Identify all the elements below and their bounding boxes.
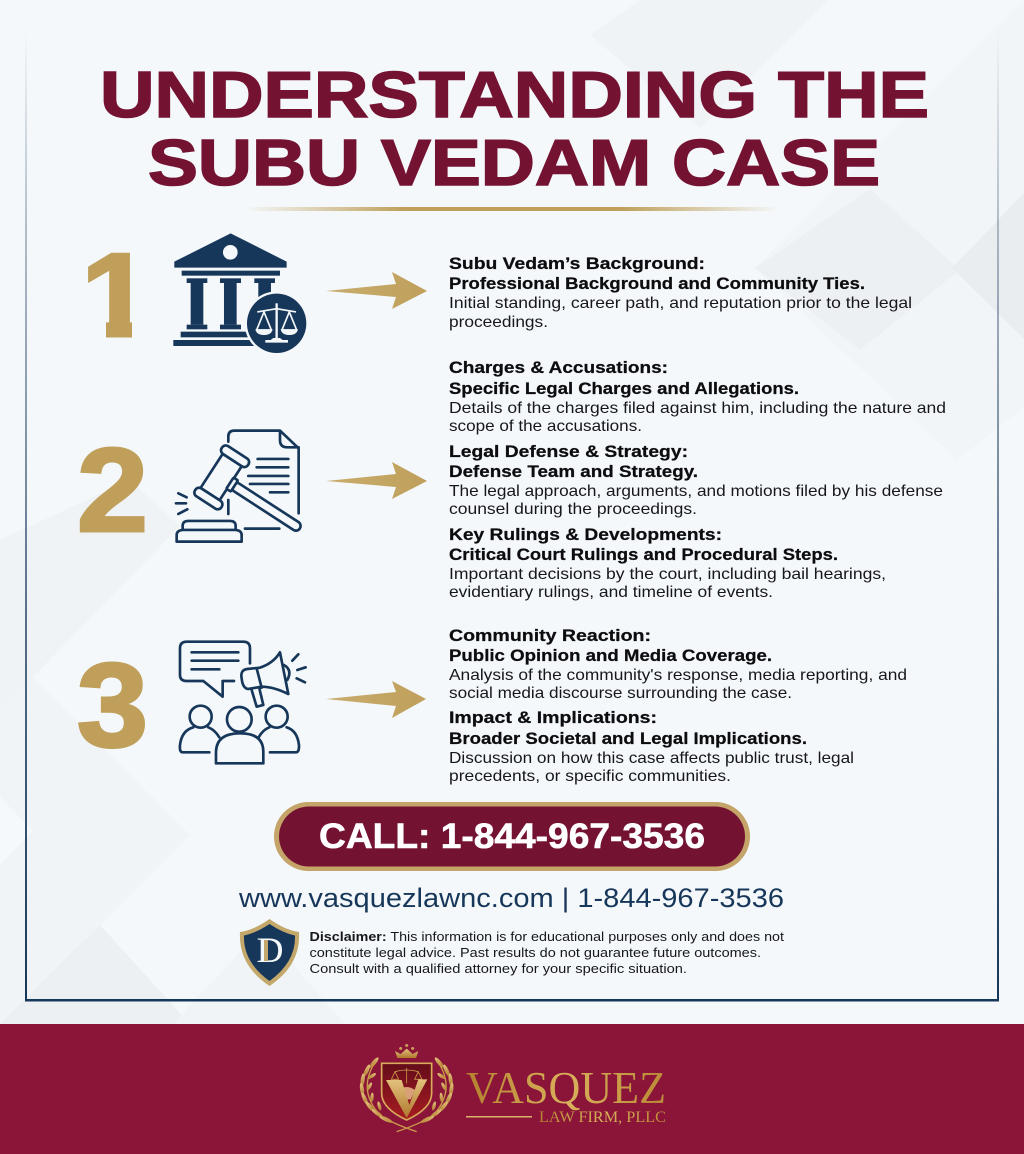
text block: Charges: Details of the charges filed against him, including the nature and <box>449 400 946 417</box>
arrow 3 <box>326 681 426 718</box>
text block: Charges: Specific Legal Charges and Allegations. <box>449 379 799 398</box>
icon: disclaimer shield <box>240 919 299 986</box>
text block: Background <box>449 254 912 331</box>
text block: Impact: Discussion on how this case affects public trust, legal <box>449 750 854 767</box>
right laurel <box>397 1056 454 1132</box>
logo wordmark: VASQUEZ <box>466 1062 666 1113</box>
text block: Defense: counsel during the proceedings. <box>449 501 697 518</box>
text block: Community: Community Reaction: <box>449 626 651 645</box>
disclaimer text: Disclaimer: This information is for educational purposes only and does not <box>310 929 784 944</box>
number 3: 3 <box>77 639 148 772</box>
text block: Community <box>449 626 907 702</box>
arrow 2 <box>326 462 427 499</box>
footer band <box>0 1024 1024 1154</box>
left laurel <box>359 1056 417 1132</box>
number 2: 2 <box>77 424 148 557</box>
icon: gavel and document <box>176 431 316 553</box>
icon: speech bubble, megaphone and people <box>180 642 306 763</box>
number 1: 1 <box>81 229 152 362</box>
text block: Background: Initial standing, career path, and reputation prior to the legal <box>449 295 912 312</box>
arrow 1 <box>326 272 427 309</box>
icon: disclaimer shield: D <box>256 930 284 970</box>
text block: Community: Analysis of the community's response, media reporting, and <box>449 667 907 684</box>
text block: Background: proceedings. <box>449 314 548 331</box>
text block: Charges: scope of the accusations. <box>449 418 642 435</box>
text block: Rulings: evidentiary rulings, and timeline of events. <box>449 584 773 601</box>
crest shield <box>382 1063 432 1120</box>
text block: Impact: Impact & Implications: <box>449 708 657 727</box>
text block: Community: social media discourse surrounding the case. <box>449 685 792 702</box>
text block: Charges: Charges & Accusations: <box>449 358 668 377</box>
call button <box>274 802 750 871</box>
text block: Charges <box>449 358 946 435</box>
text block: Rulings <box>449 525 886 601</box>
text block: Defense: The legal approach, arguments, and motions filed by his defense <box>449 483 943 500</box>
gold title rule <box>245 207 780 211</box>
text block: Defense: Defense Team and Strategy. <box>449 462 698 481</box>
logo emblem <box>359 1044 454 1132</box>
text block: Rulings: Important decisions by the court, including bail hearings, <box>449 566 886 583</box>
text block: Background: Subu Vedam’s Background: <box>449 254 705 273</box>
title: UNDERSTANDING THE <box>100 58 929 131</box>
text block: Impact: Broader Societal and Legal Implications. <box>449 729 807 748</box>
title <box>100 58 929 199</box>
logo wordmark: LAW FIRM, PLLC <box>539 1109 666 1126</box>
icon: courthouse with scales <box>173 233 309 355</box>
crown <box>395 1044 418 1058</box>
disclaimer text <box>310 929 784 976</box>
text block: Rulings: Key Rulings & Developments: <box>449 525 722 544</box>
text block: Defense: Legal Defense & Strategy: <box>449 442 688 461</box>
text block: Impact <box>449 708 854 785</box>
contact line: www.vasquezlawnc.com | 1-844-967-3536 <box>238 883 784 913</box>
text block: Rulings: Critical Court Rulings and Procedural Steps. <box>449 545 838 564</box>
call button: CALL: 1-844-967-3536 <box>319 817 705 856</box>
text block: Defense <box>449 442 943 518</box>
disclaimer text: constitute legal advice. Past results do not guarantee future outcomes. <box>310 945 761 960</box>
disclaimer text: Consult with a qualified attorney for your specific situation. <box>310 961 687 976</box>
title: SUBU VEDAM CASE <box>148 126 880 199</box>
text block: Impact: precedents, or specific communities. <box>449 768 731 785</box>
text block: Background: Professional Background and Community Ties. <box>449 274 865 293</box>
text block: Community: Public Opinion and Media Coverage. <box>449 646 772 665</box>
